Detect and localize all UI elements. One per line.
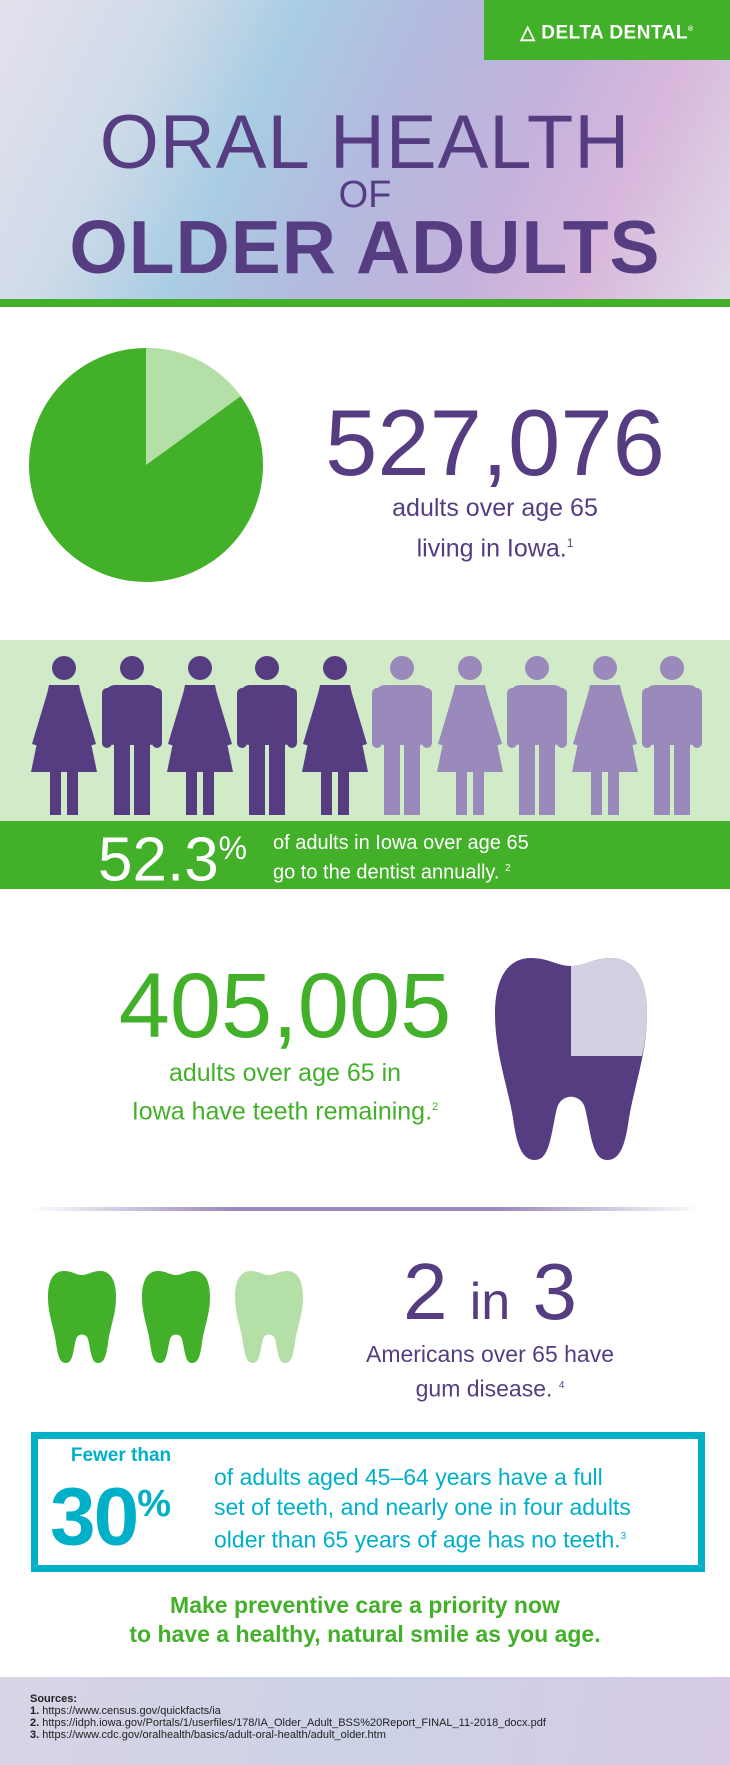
callout box: 30%: 30% [50, 1471, 169, 1562]
call to action: to have a healthy, natural smile as you age. [129, 1621, 601, 1647]
stat: 405,005: Iowa have teeth remaining.2 [132, 1097, 438, 1125]
stat: 405,005 [119, 955, 451, 1125]
stat: 527,076: 527,076 [325, 390, 665, 495]
stat: 2 in 3 [366, 1247, 614, 1402]
stat: 2 in 3: gum disease. 4 [416, 1376, 564, 1402]
people panel [0, 640, 730, 821]
title: ORAL HEALTH [100, 100, 630, 185]
callout box: 30%: Fewer than [71, 1445, 171, 1466]
divider [28, 1207, 703, 1211]
stat: 527,076: adults over age 65 [392, 494, 598, 522]
stat: 405,005: 405,005 [119, 955, 451, 1057]
stat: 527,076: living in Iowa.1 [417, 534, 573, 562]
stat: 405,005: adults over age 65 in [169, 1059, 401, 1087]
title [69, 100, 661, 289]
callout box: 30% [31, 1432, 705, 1572]
green stat bar: 52.3%: of adults in Iowa over age 65 [273, 832, 529, 854]
icon: big tooth [495, 958, 647, 1160]
logo [484, 0, 730, 60]
callout box: 30%: set of teeth, and nearly one in four adults [214, 1494, 631, 1520]
title: OLDER ADULTS [69, 205, 661, 289]
call to action [129, 1592, 601, 1647]
sources: 3. https://www.cdc.gov/oralhealth/basics/adult-oral-health/adult_older.htm [30, 1729, 386, 1741]
sources [0, 1677, 730, 1765]
sources: 2. https://idph.iowa.gov/Portals/1/userfiles/178/IA_Older_Adult_BSS%20Report_FINAL_11-2018_docx.pdf [30, 1717, 546, 1729]
icons: three teeth [48, 1271, 303, 1363]
callout box: 30%: older than 65 years of age has no teeth.3 [214, 1527, 626, 1553]
stat: 2 in 3: Americans over 65 have [366, 1341, 614, 1367]
title: OF [339, 174, 391, 216]
sources: Sources: [30, 1693, 77, 1705]
pie chart [29, 348, 263, 582]
stat: 527,076 [325, 390, 665, 562]
stat: 2 in 3: 2 in 3 [403, 1247, 577, 1336]
green stat bar: 52.3%: go to the dentist annually. 2 [273, 862, 511, 884]
header background [0, 0, 730, 299]
green stat bar: 52.3% [0, 821, 730, 889]
call to action: Make preventive care a priority now [170, 1592, 560, 1618]
callout box: 30%: of adults aged 45–64 years have a full [214, 1464, 603, 1490]
sources: 1. https://www.census.gov/quickfacts/ia [30, 1705, 221, 1717]
logo: △ DELTA DENTAL® [520, 22, 694, 43]
